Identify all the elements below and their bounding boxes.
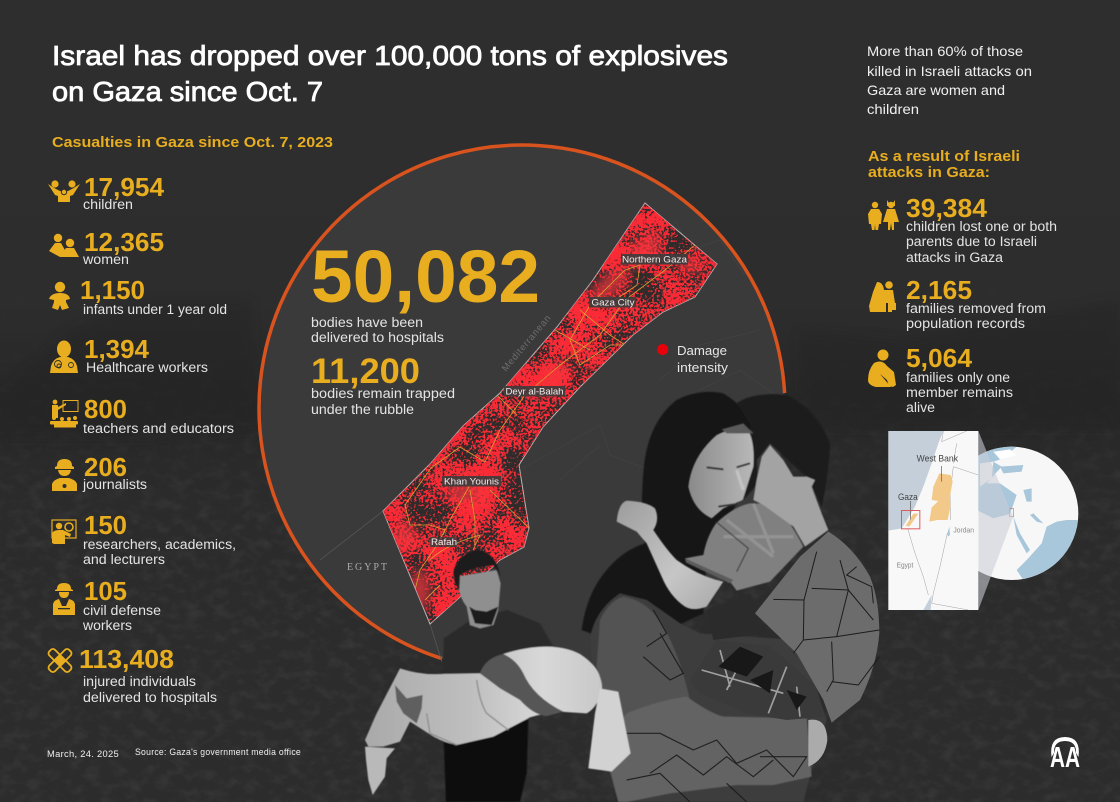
title: on Gaza since Oct. 7 — [52, 76, 323, 107]
stat: children: children — [83, 197, 133, 212]
stat: families with one survivor — [868, 343, 1013, 415]
child's shirt — [685, 503, 803, 591]
stat: families removed: population records — [906, 316, 1025, 331]
icon: teacher and class — [50, 400, 78, 428]
stat: women — [49, 227, 164, 267]
stat: families with one survivor: families only one — [906, 370, 1010, 385]
headline stat: 11,200: 11,200 — [311, 352, 420, 391]
inset labels: West Bank — [917, 454, 958, 464]
stat: families removed: 2,165 — [906, 275, 972, 305]
map roads — [405, 245, 695, 600]
stat: healthcare workers — [50, 334, 208, 375]
headline stat: 50,082: delivered to hospitals — [311, 330, 444, 345]
icon: civil defense worker — [53, 583, 75, 615]
icon: family — [869, 281, 896, 312]
map label: Deyr al-Balah: Deyr al-Balah — [506, 386, 564, 398]
man's head — [457, 570, 501, 628]
stat: orphaned children: 39,384 — [906, 193, 988, 223]
map label: Northern Gaza: Northern Gaza — [622, 254, 688, 266]
icon: children — [48, 180, 80, 202]
background: rubble photograph — [1, 514, 1120, 802]
label: Egypt: EGYPT — [347, 562, 387, 573]
icon: journalist — [52, 459, 77, 491]
locator: inset map and globe — [888, 431, 1087, 610]
child's hair — [737, 394, 830, 507]
right intro text: More than 60% of those — [867, 43, 1023, 59]
photo: mother holding child — [582, 392, 879, 802]
stat: researchers — [52, 510, 236, 567]
icon: healthcare worker — [50, 340, 78, 373]
stat: women: 12,365 — [84, 227, 164, 257]
stat: infants: 1,150 — [80, 275, 145, 305]
stat: researchers: researchers, academics, — [83, 537, 236, 552]
title — [52, 40, 728, 107]
child's arm and fist — [617, 501, 723, 609]
inset labels: Jordan — [953, 525, 974, 534]
source: Source: Gaza's government media office — [135, 747, 301, 758]
man's trousers — [443, 717, 528, 802]
headline stat: 11,200: under the rubble — [311, 402, 414, 417]
stat: civil defense — [53, 576, 161, 633]
child's hand on head — [753, 445, 828, 547]
headline stat: 50,082: 50,082 — [311, 235, 540, 318]
inset labels: Gaza — [898, 492, 918, 502]
right intro text: children — [867, 101, 919, 117]
icon: sitting person — [868, 350, 896, 387]
map label: Khan Younis: Khan Younis — [444, 476, 499, 488]
stat: infants: infants under 1 year old — [83, 302, 227, 317]
stat: civil defense: 105 — [84, 576, 127, 606]
headline stat: 50,082: bodies have been — [311, 315, 423, 330]
stat: healthcare workers: Healthcare workers — [86, 360, 208, 375]
stat: teachers: teachers and educators — [83, 421, 234, 436]
logo: AA — [1050, 737, 1080, 774]
stat: infants — [49, 275, 227, 317]
stat: teachers — [50, 394, 234, 436]
map circle panel — [259, 145, 785, 671]
stat: orphaned children: children lost one or both — [906, 219, 1057, 234]
right column heading: attacks in Gaza: — [868, 165, 990, 181]
title: Israel has dropped over 100,000 tons of explosives — [52, 40, 728, 71]
legend: damage intensity: intensity — [677, 361, 729, 375]
icon: infant — [49, 282, 70, 310]
logo: AA: AA — [1050, 742, 1080, 774]
coat body — [590, 593, 827, 802]
globe — [978, 446, 1078, 580]
stat: injured — [47, 644, 217, 705]
stat: civil defense: civil defense — [83, 603, 161, 618]
stat: journalists: journalists — [82, 477, 147, 492]
icon: researcher at board — [52, 520, 76, 544]
stat: journalists — [52, 452, 147, 492]
left column heading: Casualties in Gaza since Oct. 7, 2023 — [52, 135, 333, 151]
inset labels — [897, 454, 974, 569]
woman's face — [688, 429, 754, 518]
icon: women — [49, 234, 79, 257]
child's plaid trousers and woman's sleeve — [690, 532, 879, 767]
map label: Gaza City: Gaza City — [592, 298, 635, 308]
shroud — [365, 647, 602, 747]
stat: injured: injured individuals — [83, 674, 196, 689]
right intro text — [867, 43, 1032, 117]
legend: damage intensity: Damage — [677, 344, 727, 358]
map label: Rafah: Rafah — [431, 537, 457, 548]
stat: researchers: 150 — [84, 510, 127, 540]
stat: children — [48, 172, 165, 212]
icon: bandage cross — [47, 648, 73, 673]
hijab shoulder and back — [582, 392, 753, 637]
stat: families with one survivor: 5,064 — [906, 343, 973, 373]
inset map — [888, 431, 978, 610]
stat: civil defense: workers — [82, 618, 132, 633]
stat: orphaned children: attacks in Gaza — [906, 250, 1004, 265]
legend: damage intensity — [657, 344, 729, 375]
left column: casualty statistics — [47, 172, 236, 705]
man's t-shirt — [443, 610, 553, 740]
right column heading — [868, 149, 1020, 181]
inset labels: Egypt — [897, 560, 914, 569]
right intro text: killed in Israeli attacks on — [867, 63, 1032, 79]
stat: teachers: 800 — [84, 394, 127, 424]
Gaza shape — [906, 514, 918, 527]
headline stat: 11,200 — [311, 352, 455, 417]
West Bank shape — [929, 473, 953, 522]
icon: two children — [868, 200, 899, 230]
stat: families with one survivor: alive — [906, 400, 935, 415]
stat: orphaned children: parents due to Israeli — [906, 234, 1037, 249]
photo: man carrying shrouded child — [365, 550, 631, 802]
zoom cone — [978, 431, 1013, 610]
date: March, 24. 2025 — [47, 749, 119, 760]
stat: journalists: 206 — [84, 452, 127, 482]
label: Mediterranean: Mediterranean — [500, 313, 553, 374]
man's arms and hands — [480, 654, 563, 716]
stat: families removed — [869, 275, 1046, 331]
stat: researchers: and lecturers — [83, 552, 165, 567]
right intro text: Gaza are women and — [867, 82, 1005, 98]
right column heading: As a result of Israeli — [868, 149, 1020, 165]
stat: families with one survivor: member remains — [906, 385, 1013, 400]
stat: women: women — [82, 252, 129, 267]
Gaza damage map — [380, 200, 720, 630]
stat: children: 17,954 — [84, 172, 165, 202]
stat: healthcare workers: 1,394 — [84, 334, 150, 364]
stat: injured: 113,408 — [79, 644, 174, 674]
stat: orphaned children — [868, 193, 1057, 265]
stat: families removed: families removed from — [906, 301, 1046, 316]
stat: injured: delivered to hospitals — [83, 690, 217, 705]
shroud ties — [588, 688, 631, 772]
headline stat: 11,200: bodies remain trapped — [311, 386, 455, 401]
